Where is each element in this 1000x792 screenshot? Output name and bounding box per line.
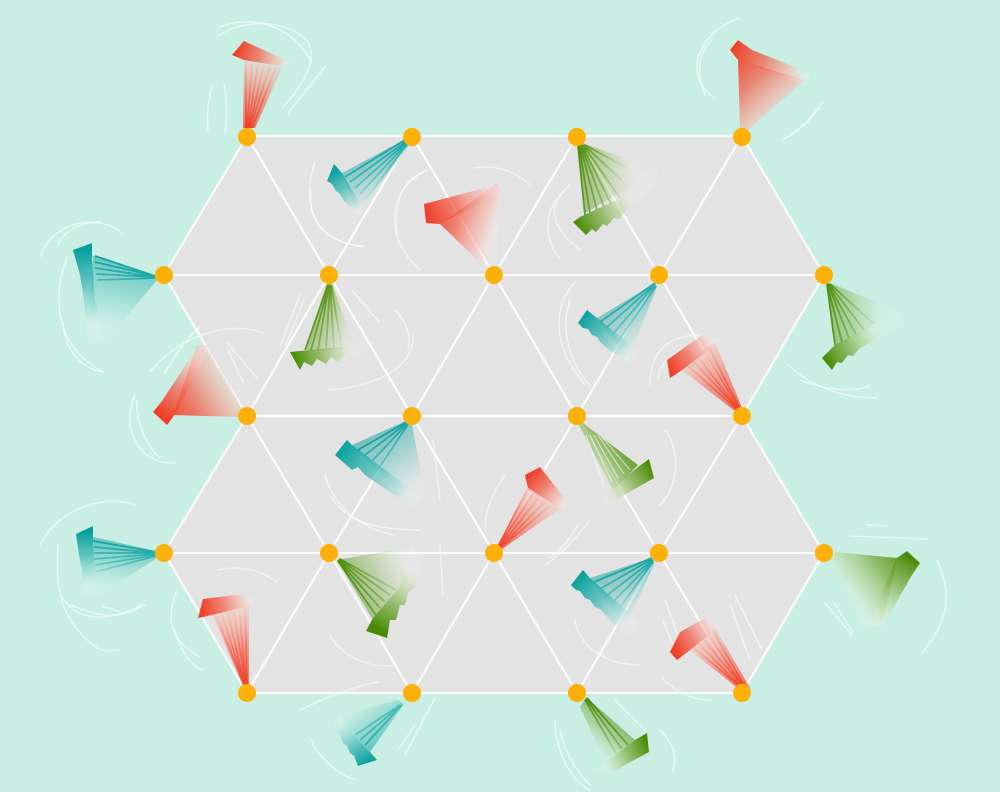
- fan: green upper middle: [290, 283, 375, 370]
- fan: green middle right: [578, 423, 654, 505]
- fan: red bottom right: [670, 618, 750, 690]
- nodes: [155, 128, 833, 702]
- fan: teal middle: [335, 420, 425, 508]
- fan: teal bottom: [334, 700, 404, 766]
- fan: teal left lower: [76, 526, 157, 597]
- fan: red lower left: [198, 595, 255, 686]
- fan: green top: [573, 143, 660, 235]
- fan: green right: [822, 283, 905, 370]
- fan: red right middle: [667, 333, 742, 412]
- fan: red centre top: [424, 183, 500, 272]
- fan: teal lower right: [571, 558, 655, 636]
- fan: red centre: [496, 467, 570, 552]
- lattice lines: [164, 136, 824, 693]
- fan: teal left upper: [73, 243, 157, 345]
- fan: green bottom: [580, 697, 649, 774]
- fan: green lower middle: [337, 545, 423, 638]
- panel: grey hexagonal lattice: [164, 136, 824, 693]
- fan: teal upper right: [578, 283, 657, 365]
- fan: red left middle: [153, 343, 243, 425]
- fan: red top-left: [232, 41, 292, 128]
- fan: red top-right: [730, 40, 812, 130]
- fan: green far right: [833, 551, 920, 628]
- fan: teal top: [327, 138, 409, 216]
